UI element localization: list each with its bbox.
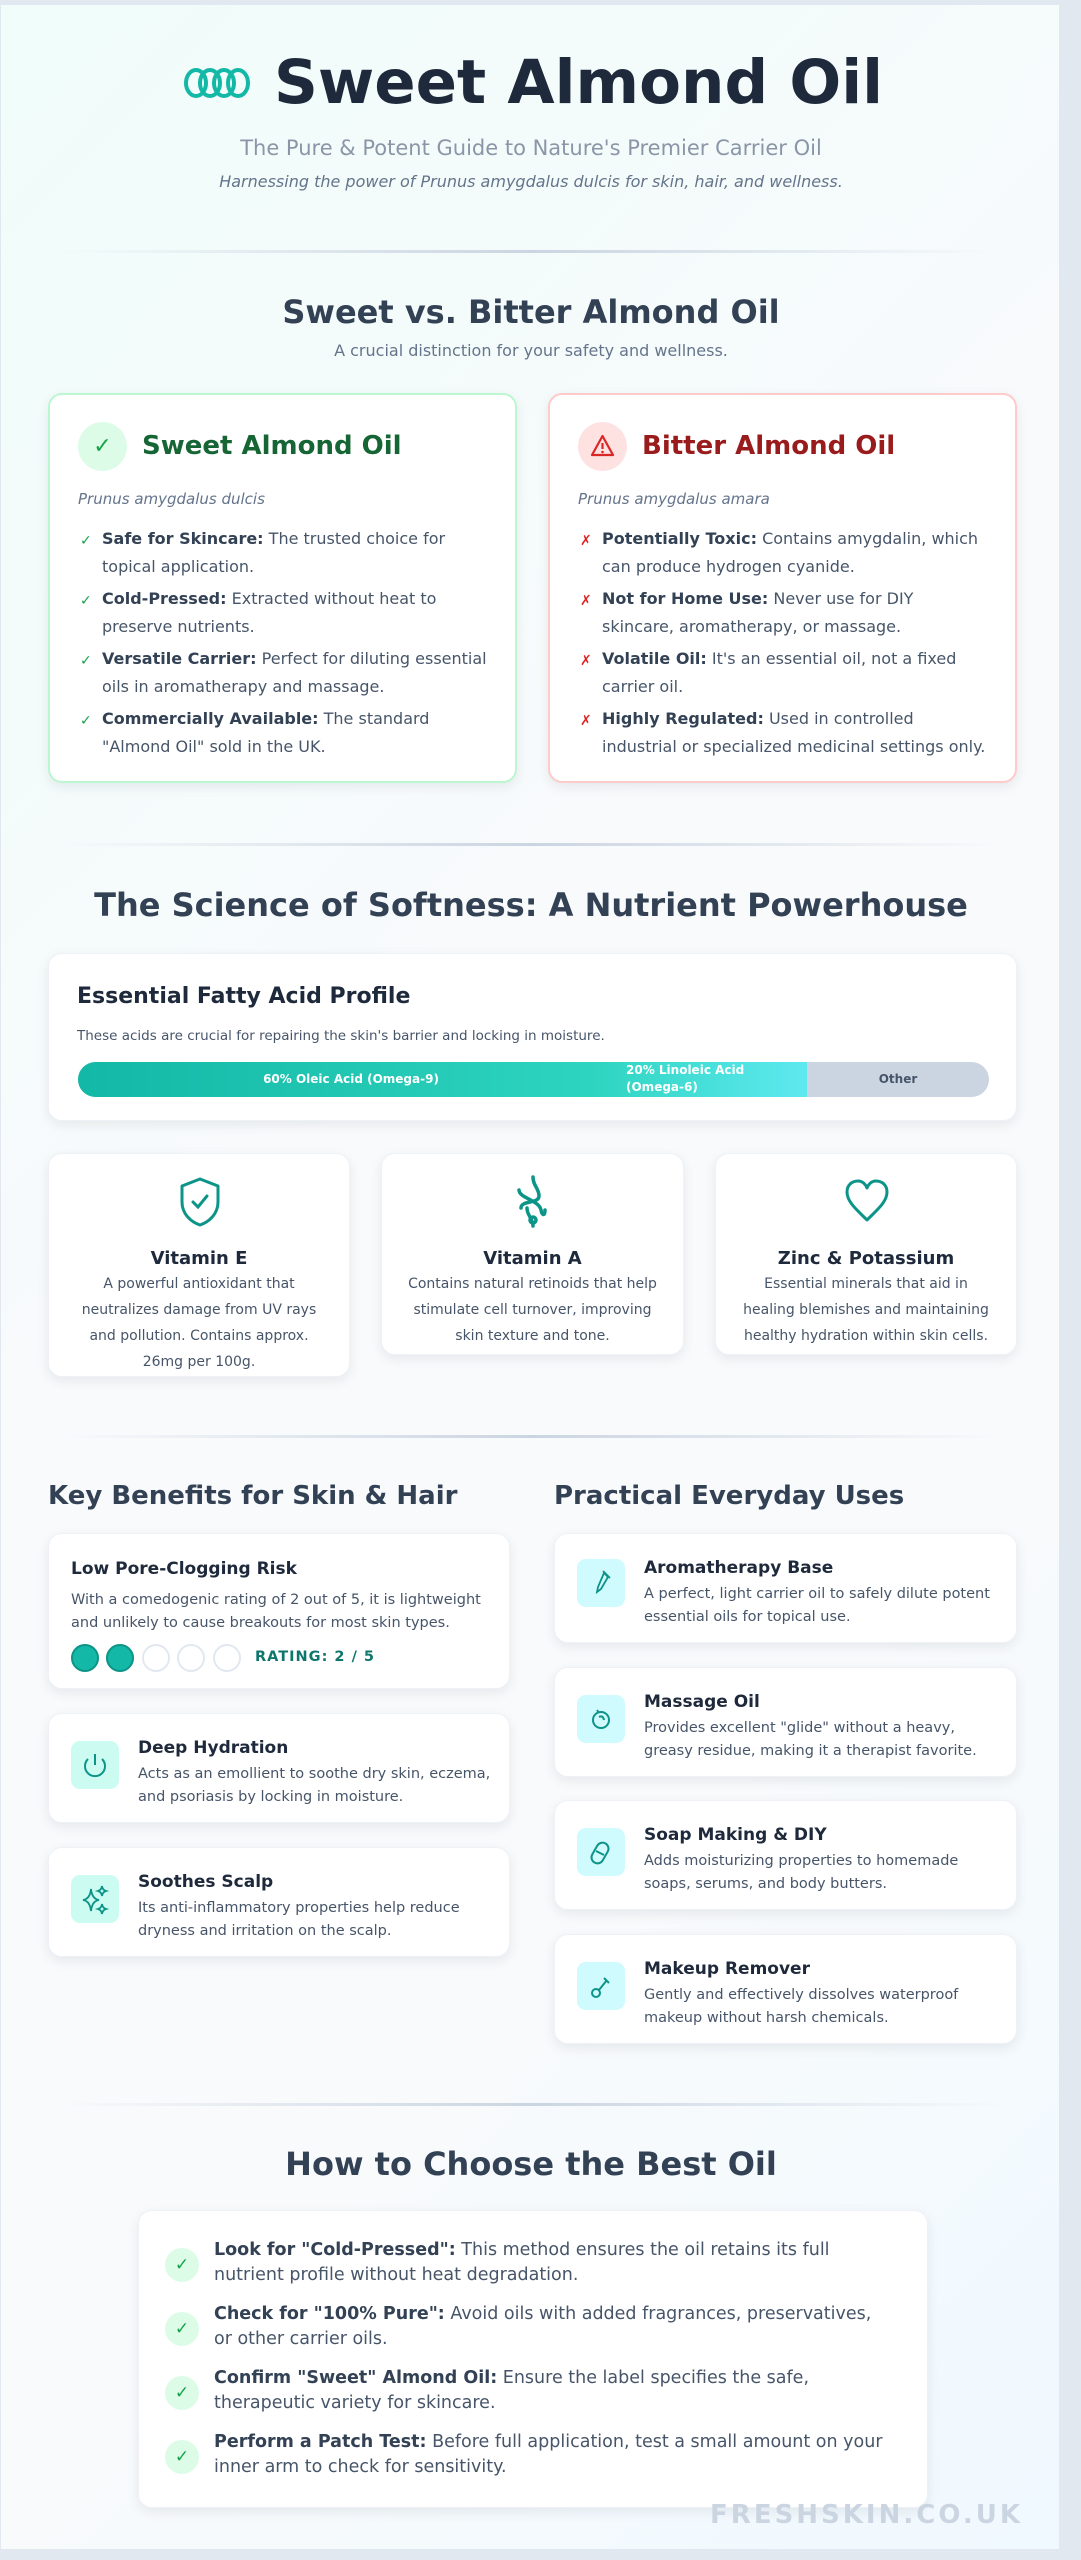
subheading: A crucial distinction for your safety and wellness.: [334, 341, 728, 360]
list: Commercially Available: The standard "Almond Oil" sold in the UK.: [102, 709, 429, 756]
list: ✗: [580, 713, 592, 729]
text: Essential minerals that aid in healing blemishes and maintaining healthy hydration within skin cells.: [743, 1276, 989, 1344]
list: ✗: [580, 533, 592, 549]
icon: almond rings: [184, 68, 250, 98]
checklist items: ✓: [175, 2319, 189, 2339]
panel: zinc & potassium: [715, 1153, 1017, 1355]
icon: check circle: ✓: [93, 434, 112, 459]
list: Not for Home Use: Never use for DIY skincare, aromatherapy, or massage.: [602, 589, 913, 636]
card: deep hydration: [48, 1713, 510, 1823]
list: [80, 529, 487, 756]
panel: fatty acid profile: [48, 953, 1017, 1121]
panel: vitamin E: [48, 1153, 350, 1377]
list: ✓: [80, 593, 92, 609]
card: makeup remover: Gently and effectively dissolves waterproof makeup without harsh chemicals.: [644, 1987, 958, 2026]
heading: sweet vs bitter: Sweet vs. Bitter Almond Oil: [282, 293, 780, 331]
heading: how to choose: How to Choose the Best Oil: [285, 2145, 777, 2183]
list: Safe for Skincare: The trusted choice for topical application.: [102, 529, 445, 576]
text: A powerful antioxidant that neutralizes damage from UV rays and pollution. Contains approx. 26mg per 100g.: [82, 1276, 316, 1370]
card: soap making: [554, 1800, 1017, 1910]
list: Potentially Toxic: Contains amygdalin, which can produce hydrogen cyanide.: [602, 529, 978, 576]
heading: key benefits: Key Benefits for Skin & Hair: [48, 1481, 457, 1511]
card heading: Sweet Almond Oil: [142, 431, 402, 461]
header: [184, 47, 883, 191]
card: makeup remover: Makeup Remover: [644, 1959, 810, 1979]
list: Highly Regulated: Used in controlled: [602, 709, 914, 728]
icon: warning: [578, 422, 627, 471]
heading: science: The Science of Softness: A Nutrient Powerhouse: [94, 886, 968, 924]
checklist items: ✓: [175, 2255, 189, 2275]
text: Zinc & Potassium: [778, 1248, 954, 1269]
list: ✓: [80, 533, 92, 549]
bar chart: 20% Linoleic Acid (Omega-6): [626, 1063, 744, 1094]
text: Vitamin E: [151, 1248, 247, 1269]
bar chart: 60% Oleic Acid (Omega-9): [263, 1072, 439, 1086]
icon: hand: [577, 1695, 625, 1743]
card: soap making: Soap Making & DIY: [644, 1825, 827, 1845]
icon: dna: [517, 1175, 547, 1228]
list: ✓: [80, 653, 92, 669]
card: deep hydration: Acts as an emollient to soothe dry skin, eczema, and psoriasis by locking in moisture.: [138, 1766, 490, 1805]
icon: power: [71, 1741, 119, 1789]
bar chart: Other: [879, 1072, 917, 1086]
checklist items: Look for "Cold-Pressed": This method ensures the oil retains its full nutrient profile without heat degradation.: [214, 2240, 830, 2285]
list: industrial or specialized medicinal settings only.: [602, 737, 985, 756]
checklist items: ✓: [175, 2383, 189, 2403]
card: aromatherapy base: A perfect, light carrier oil to safely dilute potent essential oils for topical use.: [644, 1586, 990, 1625]
list: Cold-Pressed: Extracted without heat to preserve nutrients.: [102, 589, 436, 636]
footer brand: FRESHSKIN.CO.UK: [710, 2500, 1023, 2530]
heading: practical uses: Practical Everyday Uses: [554, 1481, 904, 1511]
checklist items: Check for "100% Pure": Avoid oils with added fragrances, preservatives,: [214, 2304, 871, 2324]
card: soothes scalp: Soothes Scalp: [138, 1872, 273, 1892]
card: low pore-clogging risk: Low Pore-Clogging Risk: [71, 1559, 297, 1579]
list: ✗: [580, 653, 592, 669]
list: Versatile Carrier: Perfect for diluting essential oils in aromatherapy and massage.: [102, 649, 487, 696]
card: deep hydration: Deep Hydration: [138, 1738, 288, 1758]
latin name: Prunus amygdalus dulcis: [78, 490, 265, 508]
tagline: Harnessing the power of Prunus amygdalus dulcis for skin, hair, and wellness.: [219, 172, 843, 191]
icon: sparkles: [71, 1875, 119, 1923]
panel: bitter almond oil: [548, 393, 1017, 783]
icon: brush: [577, 1962, 625, 2010]
card: soap making: Adds moisturizing properties to homemade soaps, serums, and body butters.: [644, 1853, 958, 1892]
rating dots: [71, 1644, 375, 1672]
card: low pore-clogging risk: With a comedogenic rating of 2 out of 5, it is lightweight and unlikely to cause breakouts for most skin types.: [71, 1592, 481, 1631]
card: low pore-clogging risk: [48, 1533, 510, 1689]
list: Volatile Oil: It's an essential oil, not a fixed carrier oil.: [602, 649, 956, 696]
text: Vitamin A: [483, 1248, 582, 1269]
description: These acids are crucial for repairing the skin's barrier and locking in moisture.: [77, 1028, 605, 1044]
panel: checklist: [138, 2210, 928, 2508]
latin name: Prunus amygdalus amara: [578, 490, 770, 508]
checklist items: [165, 2240, 883, 2477]
icon: dropper: [577, 1559, 625, 1607]
list: ✓: [80, 713, 92, 729]
text: Contains natural retinoids that help stimulate cell turnover, improving skin texture and tone.: [408, 1276, 657, 1344]
icon: pill: [577, 1828, 625, 1876]
heading: Essential Fatty Acid Profile: [77, 984, 410, 1009]
card: soothes scalp: Its anti-inflammatory properties help reduce dryness and irritation on the scalp.: [138, 1900, 460, 1939]
title: Sweet Almond Oil: [274, 47, 883, 118]
icon: heart: [846, 1180, 888, 1222]
panel: sweet almond oil: [48, 393, 517, 783]
card: makeup remover: [554, 1934, 1017, 2044]
card: aromatherapy base: [554, 1533, 1017, 1643]
list: ✗: [580, 593, 592, 609]
card: soothes scalp: [48, 1847, 510, 1957]
bar chart: [78, 1062, 989, 1097]
checklist items: Perform a Patch Test: Before full application, test a small amount on your inner arm to check for sensitivity.: [214, 2432, 883, 2477]
card: massage oil: [554, 1667, 1017, 1777]
card heading: Bitter Almond Oil: [642, 431, 895, 461]
card: massage oil: Massage Oil: [644, 1692, 760, 1712]
list: [580, 529, 985, 756]
subtitle: The Pure & Potent Guide to Nature's Premier Carrier Oil: [240, 136, 822, 160]
panel: vitamin A: [381, 1153, 684, 1355]
rating dots: RATING: 2 / 5: [255, 1649, 375, 1665]
checklist items: Confirm "Sweet" Almond Oil: Ensure the label specifies the safe, therapeutic variety for skincare.: [214, 2368, 809, 2413]
card: massage oil: Provides excellent "glide" without a heavy, greasy residue, making it a therapist favorite.: [644, 1720, 977, 1759]
card: aromatherapy base: Aromatherapy Base: [644, 1558, 833, 1578]
icon: check circle: [78, 422, 127, 471]
checklist items: or other carrier oils.: [214, 2329, 388, 2349]
checklist items: ✓: [175, 2447, 189, 2467]
icon: shield: [180, 1178, 220, 1226]
